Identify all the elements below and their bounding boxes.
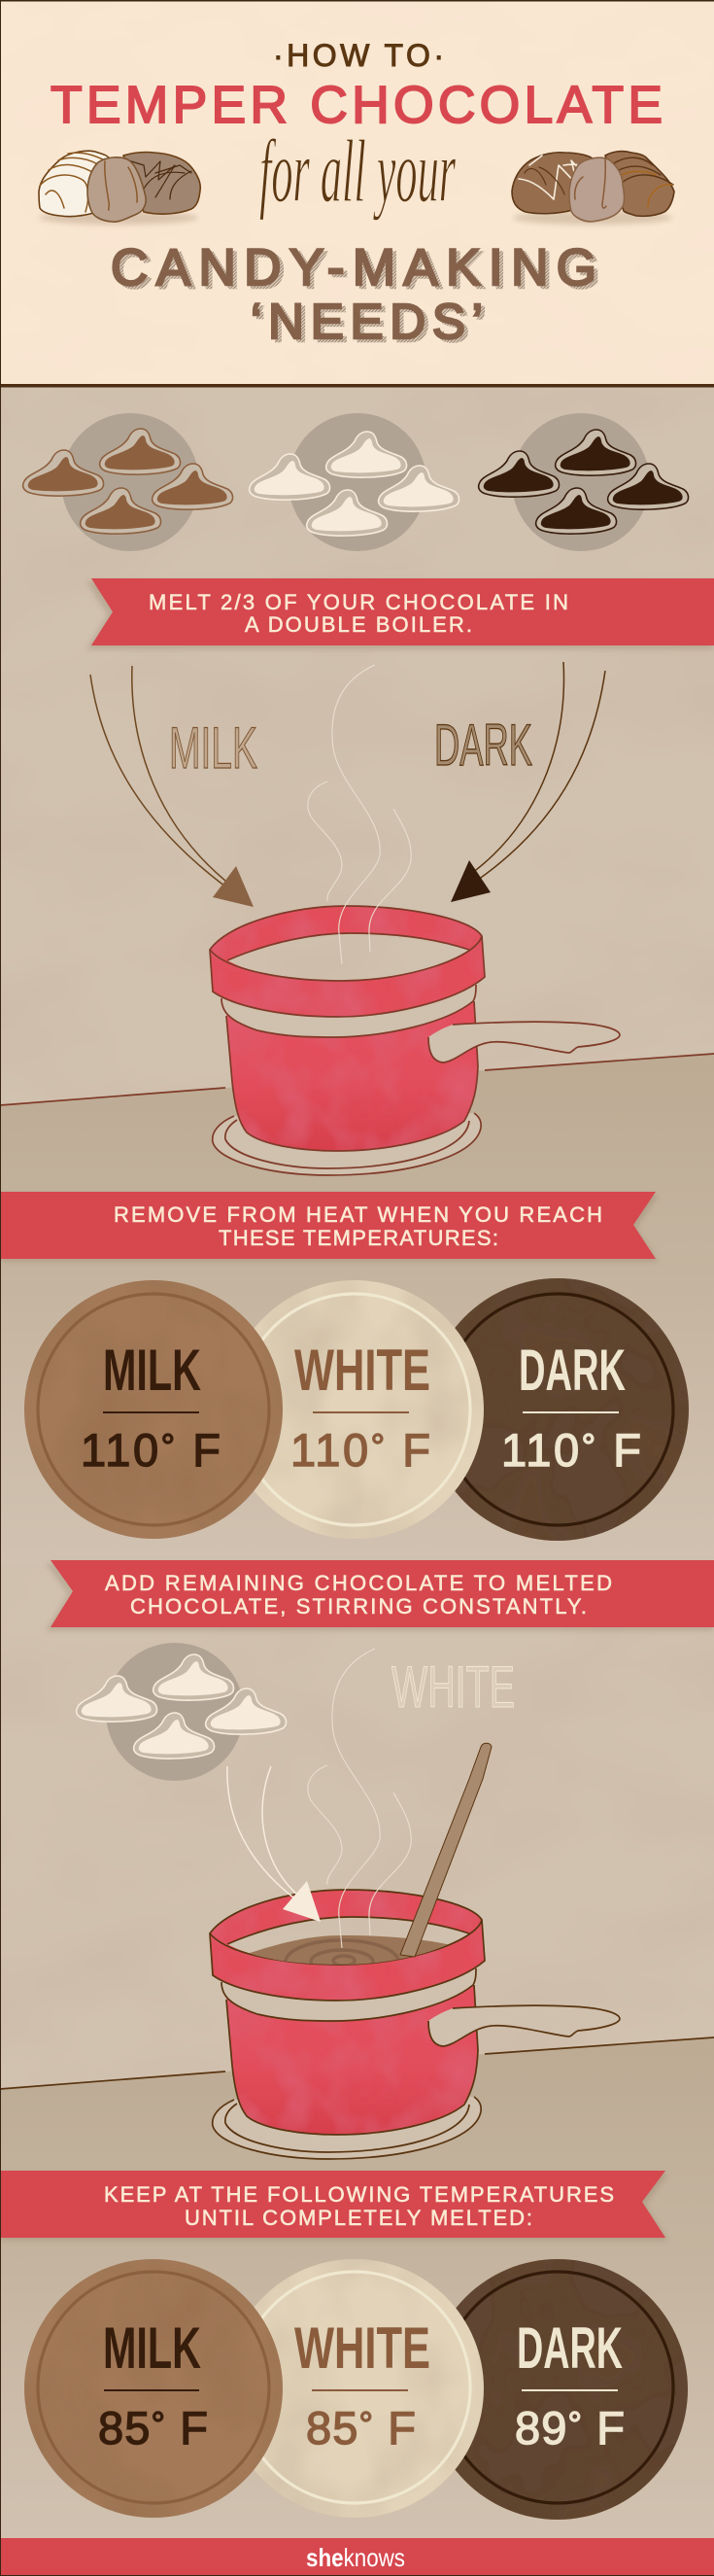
badge: dark 110: ° bbox=[582, 1426, 595, 1466]
badge: dark 89: DARK bbox=[517, 2315, 623, 2381]
badge: milk 110: ° bbox=[161, 1426, 175, 1466]
label: milk: MILK bbox=[169, 715, 257, 781]
banner: remove from heat: REMOVE FROM HEAT WHEN YOU REACH bbox=[114, 1202, 602, 1227]
badge: white 85: WHITE bbox=[294, 2315, 430, 2381]
footer bbox=[0, 2538, 714, 2576]
panel: header: for all your bbox=[259, 122, 457, 221]
icon: white chips added bbox=[77, 1643, 287, 1781]
banner: remove from heat bbox=[0, 1192, 659, 1262]
banner: melt chocolate: MELT 2/3 OF YOUR CHOCOLATE IN bbox=[149, 590, 568, 614]
title: temper chocolate: TEMPER CHOCOLATE bbox=[51, 77, 663, 134]
heading: needs: ‘NEEDS’ bbox=[255, 296, 487, 352]
table: second scene bbox=[0, 2037, 714, 2539]
chart: first temperatures bbox=[24, 1278, 689, 1541]
badge: milk 85: MILK bbox=[103, 2315, 201, 2381]
badge: dark 110: F bbox=[598, 1424, 641, 1476]
badge: dark 89 bbox=[427, 2259, 688, 2520]
label: dark: DARK bbox=[434, 713, 532, 778]
badge: white 110: WHITE bbox=[294, 1338, 430, 1403]
icon: pot with stirring spoon bbox=[210, 1743, 620, 2159]
table: first scene bbox=[0, 1054, 714, 1565]
banner: add remaining chocolate: ADD REMAINING CHOCOLATE TO MELTED bbox=[105, 1571, 612, 1595]
badge: white 110: ° bbox=[371, 1426, 385, 1466]
banner: melt chocolate: A DOUBLE BOILER. bbox=[245, 612, 472, 637]
heading: candy-making: CANDY-MAKING bbox=[111, 239, 596, 296]
arrow: dark into pot bbox=[451, 662, 605, 902]
panel: header bbox=[0, 0, 714, 387]
badge: dark 110: DARK bbox=[519, 1338, 626, 1403]
panel: chocolate chips bbox=[23, 413, 689, 551]
chart: second temperatures bbox=[24, 2259, 688, 2520]
icon: dark chips bbox=[479, 413, 689, 551]
badge: milk 110: MILK bbox=[103, 1338, 201, 1403]
badge: dark 110: 110 bbox=[501, 1424, 579, 1476]
arrow: white chips into pot bbox=[227, 1766, 321, 1922]
banner: melt chocolate bbox=[86, 578, 714, 649]
icon: left truffles bbox=[39, 151, 200, 225]
badge: milk 110: 110 bbox=[81, 1424, 158, 1476]
badge: dark 89: 89 bbox=[515, 2402, 566, 2454]
icon: double boiler pot bbox=[210, 906, 620, 1175]
badge: white 85 bbox=[225, 2259, 484, 2518]
badge: white 85: 85 bbox=[306, 2402, 357, 2454]
banner: keep at temperatures: UNTIL COMPLETELY MELTED: bbox=[185, 2206, 532, 2230]
icon: white chips bbox=[250, 413, 459, 551]
icon: milk chips bbox=[23, 413, 233, 551]
banner: add remaining chocolate bbox=[46, 1560, 714, 1631]
badge: white 110 bbox=[225, 1280, 484, 1539]
heading: candy-making: CANDY-MAKING bbox=[115, 242, 600, 299]
icon: right truffles bbox=[512, 152, 674, 225]
label: white: WHITE bbox=[391, 1654, 515, 1720]
banner: remove from heat: THESE TEMPERATURES: bbox=[219, 1226, 498, 1250]
banner: keep at temperatures bbox=[0, 2171, 668, 2241]
badge: milk 85: F bbox=[166, 2402, 208, 2454]
badge: dark 89: ° bbox=[568, 2404, 582, 2444]
badge: milk 85: 85 bbox=[98, 2402, 150, 2454]
badge: white 110: 110 bbox=[290, 1424, 368, 1476]
banner: add remaining chocolate: CHOCOLATE, STIRRING CONSTANTLY. bbox=[130, 1594, 587, 1619]
spoon bbox=[400, 1743, 492, 1957]
arrow: milk into pot bbox=[90, 666, 254, 907]
heading: needs: ‘NEEDS’ bbox=[251, 294, 483, 349]
melted chocolate bbox=[249, 1935, 448, 1965]
heading: how to: ·HOW TO· bbox=[273, 38, 444, 73]
badge: milk 85 bbox=[24, 2259, 283, 2518]
badge: milk 110 bbox=[24, 1280, 283, 1539]
logo: sheknows: sheknows bbox=[306, 2543, 405, 2572]
badge: white 110: F bbox=[388, 1424, 430, 1476]
badge: white 85: F bbox=[374, 2402, 416, 2454]
badge: dark 89: F bbox=[583, 2402, 625, 2454]
badge: milk 110: F bbox=[178, 1424, 221, 1476]
badge: milk 85: ° bbox=[152, 2404, 165, 2444]
steam: first pot bbox=[308, 665, 411, 964]
banner: keep at temperatures: KEEP AT THE FOLLOWING TEMPERATURES bbox=[104, 2182, 614, 2207]
left edge line bbox=[0, 0, 1, 2576]
badge: white 85: ° bbox=[359, 2404, 373, 2444]
steam: second pot bbox=[308, 1649, 411, 1948]
badge: dark 110 bbox=[426, 1278, 689, 1541]
